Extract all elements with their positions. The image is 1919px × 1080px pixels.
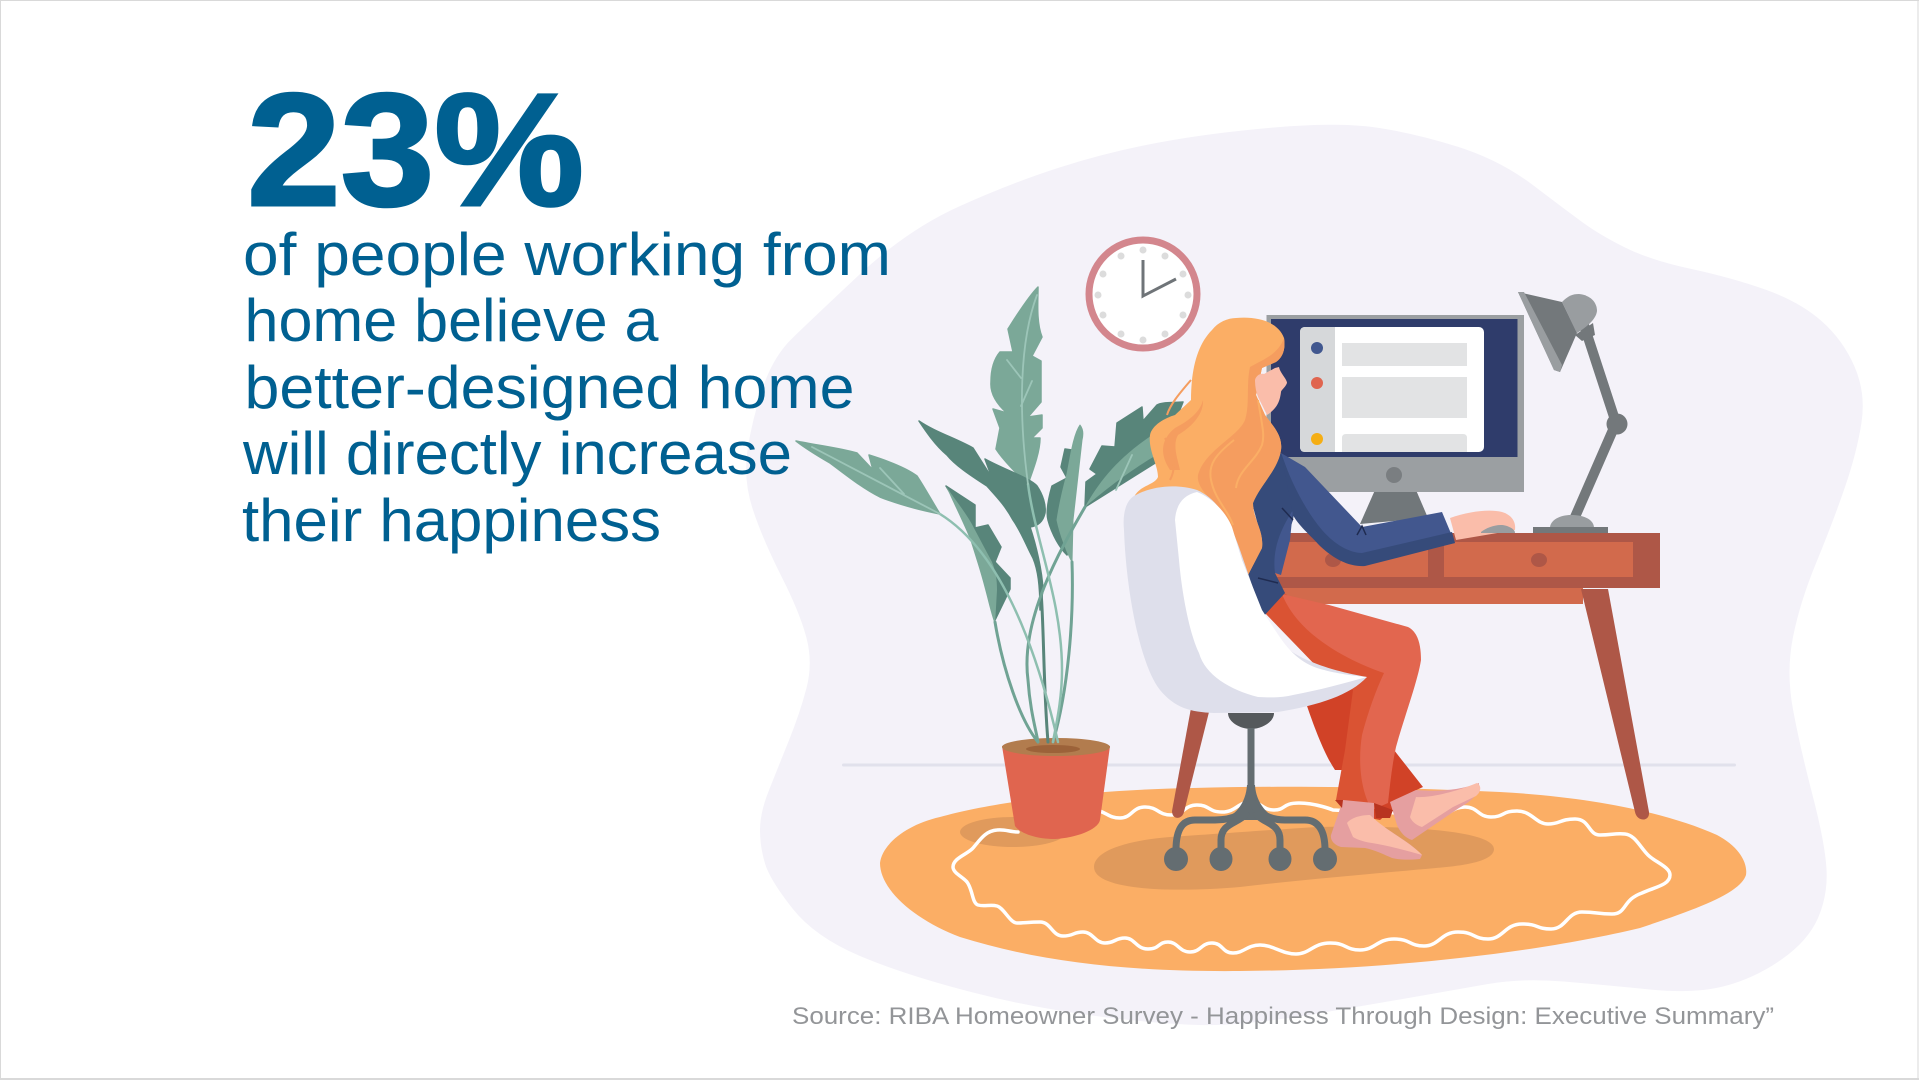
leaf: right upright [1047, 449, 1072, 555]
rug [880, 787, 1746, 971]
statement text [242, 221, 891, 554]
jacket: torso [1248, 453, 1300, 618]
desk: rear leg [1172, 708, 1209, 818]
hand and mouse [1450, 511, 1515, 540]
plant pot [1002, 738, 1110, 839]
chair shell [1124, 486, 1367, 713]
leaf: right large [1085, 402, 1183, 507]
floor line [842, 764, 1736, 766]
leaf: left large [796, 441, 940, 514]
face [1255, 367, 1287, 415]
clock [1089, 240, 1197, 348]
statistic headline: 23% [247, 60, 584, 239]
lamp [1518, 292, 1628, 534]
monitor [1266, 315, 1524, 524]
background blob [746, 125, 1863, 1025]
plant [796, 287, 1183, 742]
statement text: home believe a [244, 287, 659, 354]
trousers: back leg [1305, 680, 1423, 820]
statement text: better-designed home [244, 354, 854, 421]
woman [1124, 318, 1515, 871]
chair base [1164, 713, 1337, 871]
foot: front [1331, 800, 1422, 860]
jacket: sleeve [1281, 453, 1455, 564]
source note: Source: RIBA Homeowner Survey - Happiness Through Design: Executive Summary” [792, 1003, 1774, 1030]
statement text: will directly increase [242, 420, 792, 487]
foot: rear [1390, 783, 1479, 840]
trousers: front leg [1262, 590, 1390, 806]
leaf: centre dark [919, 421, 1045, 610]
trouser cuff [1335, 800, 1393, 818]
statement text: of people working from [243, 221, 891, 288]
desk [1260, 533, 1660, 820]
leaf: centre top [991, 287, 1042, 484]
statement text: their happiness [242, 487, 661, 554]
leaf: lower middle [946, 486, 1010, 620]
hair [1134, 318, 1285, 575]
jacket: inner fold [1274, 510, 1293, 575]
stems [812, 295, 1132, 742]
